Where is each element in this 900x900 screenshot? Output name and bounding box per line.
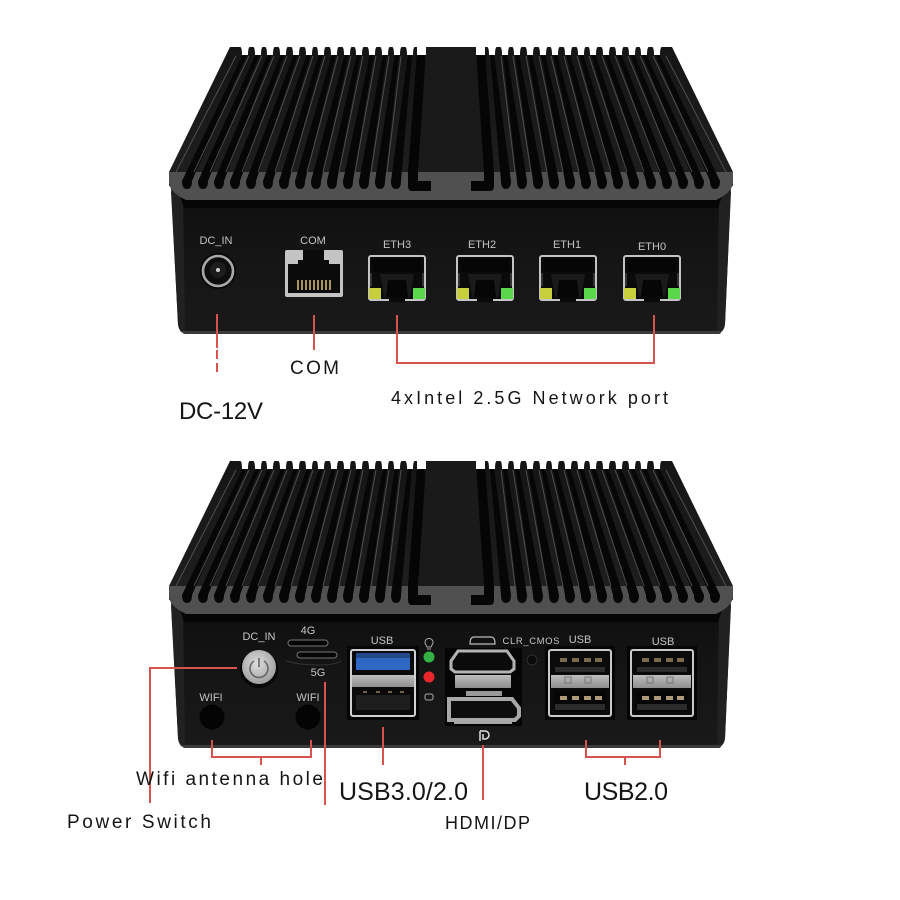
bracket: USB2.0 (586, 740, 660, 765)
port label: DC_IN: DC_IN (199, 235, 233, 247)
port: dual USB 2.0 right (627, 646, 697, 720)
antenna hole: left (200, 704, 224, 730)
port: ETH1 (540, 256, 596, 302)
callout: wifi antenna hole: Wifi antenna hole (136, 769, 323, 790)
device: top unit (rear view with network ports) (169, 47, 733, 334)
port label: USB: USB (371, 635, 393, 647)
port label: ETH2: ETH2 (468, 239, 496, 251)
callout: DC-12V: DC-12V (179, 398, 263, 425)
status icon: power light (425, 638, 433, 649)
port label: DC_IN: DC_IN (242, 631, 276, 643)
callout: USB3.0/2.0: USB3.0/2.0 (339, 778, 468, 806)
port label: WIFI left: WIFI (199, 692, 223, 704)
heatsink and chassis: top unit (169, 47, 733, 334)
port: ETH0 (624, 256, 680, 302)
callout: network ports: 4xIntel 2.5G Network port (391, 388, 668, 408)
leader line: power switch (150, 668, 237, 803)
bracket: wifi antenna holes (212, 740, 311, 765)
port label: USB right: USB (652, 636, 674, 648)
callout: COM: COM (290, 358, 339, 379)
SIM card slots (286, 640, 341, 665)
heatsink and chassis: bottom unit (169, 461, 733, 748)
port label: ETH3: ETH3 (383, 239, 411, 251)
port label: ETH1: ETH1 (553, 239, 581, 251)
port label: 4G: 4G (301, 625, 315, 637)
icon: DC power jack (200, 253, 236, 289)
leader line: COM (313, 315, 315, 350)
port label: ETH0: ETH0 (638, 241, 666, 253)
icon: micro USB (470, 637, 495, 644)
status LED: green (424, 652, 434, 662)
status icon: disk (425, 694, 433, 700)
callout: HDMI/DP: HDMI/DP (445, 813, 530, 833)
status LED: red (424, 672, 434, 682)
device: bottom unit (front view with USB and display ports) (169, 461, 733, 748)
callout: power switch: Power Switch (67, 812, 211, 833)
port label: CLR_CMOS: CLR_CMOS (502, 636, 560, 647)
leader line: DC-12V (216, 314, 218, 376)
port: ETH3 (369, 256, 425, 302)
port: COM RJ45 (285, 250, 343, 297)
bracket: network ports (397, 315, 654, 363)
leader line: USB3.0/2.0 (382, 727, 384, 765)
leader line: HDMI/DP (482, 745, 484, 800)
port: dual USB 2.0 left (545, 646, 615, 720)
port: ETH2 (457, 256, 513, 302)
port: HDMI and DisplayPort (445, 648, 522, 726)
port label: WIFI right: WIFI (296, 692, 320, 704)
port label: 5G: 5G (311, 667, 325, 679)
port: USB 3.0/2.0 stack (347, 646, 419, 720)
icon: DisplayPort logo (480, 731, 489, 741)
CMOS clear pinhole (527, 655, 537, 665)
port label: USB middle: USB (569, 634, 591, 646)
port label: COM: COM (300, 235, 326, 247)
icon: power button (240, 650, 278, 688)
antenna hole: right (296, 704, 320, 730)
callout: USB2.0: USB2.0 (584, 778, 668, 806)
leader line: 5G (324, 682, 326, 805)
